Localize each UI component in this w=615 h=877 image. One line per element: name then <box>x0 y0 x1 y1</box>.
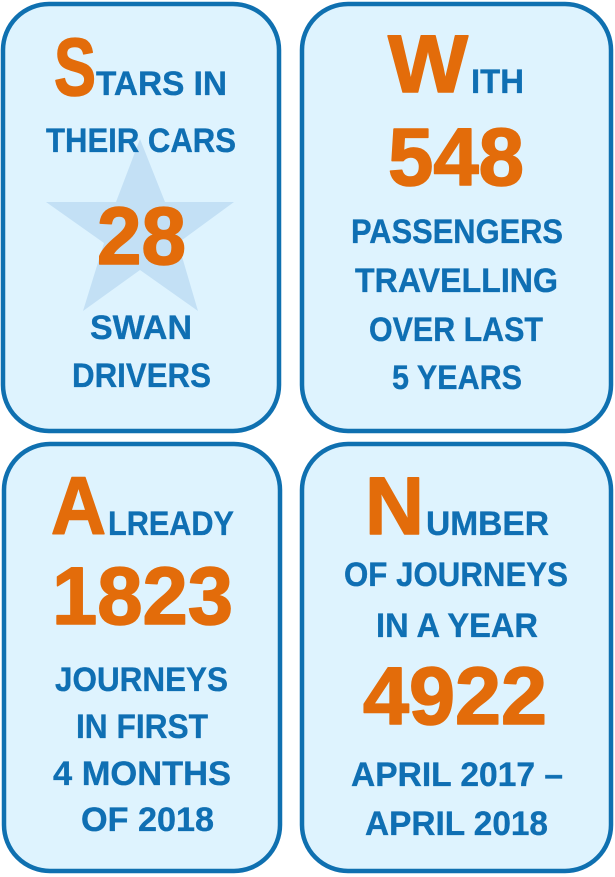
text: travelling: TRAVELLING <box>355 262 558 300</box>
number: 28: 28 <box>97 191 186 282</box>
panel: number of journeys in a year <box>302 444 611 871</box>
text: over last: OVER LAST <box>369 311 543 349</box>
heading: number: N <box>365 461 424 552</box>
text: april 2017: APRIL 2017 – <box>351 756 563 794</box>
text: swan: SWAN <box>90 309 192 347</box>
heading: number <box>365 461 549 552</box>
text: drivers: DRIVERS <box>72 357 211 395</box>
panel: stars in their cars <box>3 4 279 431</box>
text: april 2018: APRIL 2018 <box>365 805 548 843</box>
heading: with: ITH <box>471 63 524 101</box>
heading: their cars: THEIR CARS <box>46 122 236 160</box>
heading: with: W <box>388 19 469 110</box>
heading: stars in <box>54 22 227 113</box>
text: in a year: IN A YEAR <box>376 607 538 645</box>
text: journeys: JOURNEYS <box>55 661 228 699</box>
heading: already <box>51 461 234 552</box>
text: of 2018: OF 2018 <box>81 801 214 839</box>
number: 548: 548 <box>388 112 524 203</box>
text: 5 years: 5 YEARS <box>392 359 522 397</box>
panel: already 1823 journeys <box>4 444 280 871</box>
number: 1823: 1823 <box>52 551 233 642</box>
heading: number: UMBER <box>426 505 549 543</box>
heading: stars in: TARS IN <box>96 65 227 103</box>
panel: with 548 passengers <box>302 4 611 431</box>
heading: with <box>388 19 524 110</box>
number: 4922: 4922 <box>363 651 547 742</box>
icon: star <box>46 139 234 311</box>
heading: already: LREADY <box>108 505 234 543</box>
text: passengers: PASSENGERS <box>351 213 563 251</box>
text: in first: IN FIRST <box>76 708 208 746</box>
text: 4 months: 4 MONTHS <box>53 755 231 793</box>
text: of journeys: OF JOURNEYS <box>344 556 568 594</box>
heading: stars in: S <box>54 22 96 113</box>
heading: already: A <box>51 461 106 552</box>
